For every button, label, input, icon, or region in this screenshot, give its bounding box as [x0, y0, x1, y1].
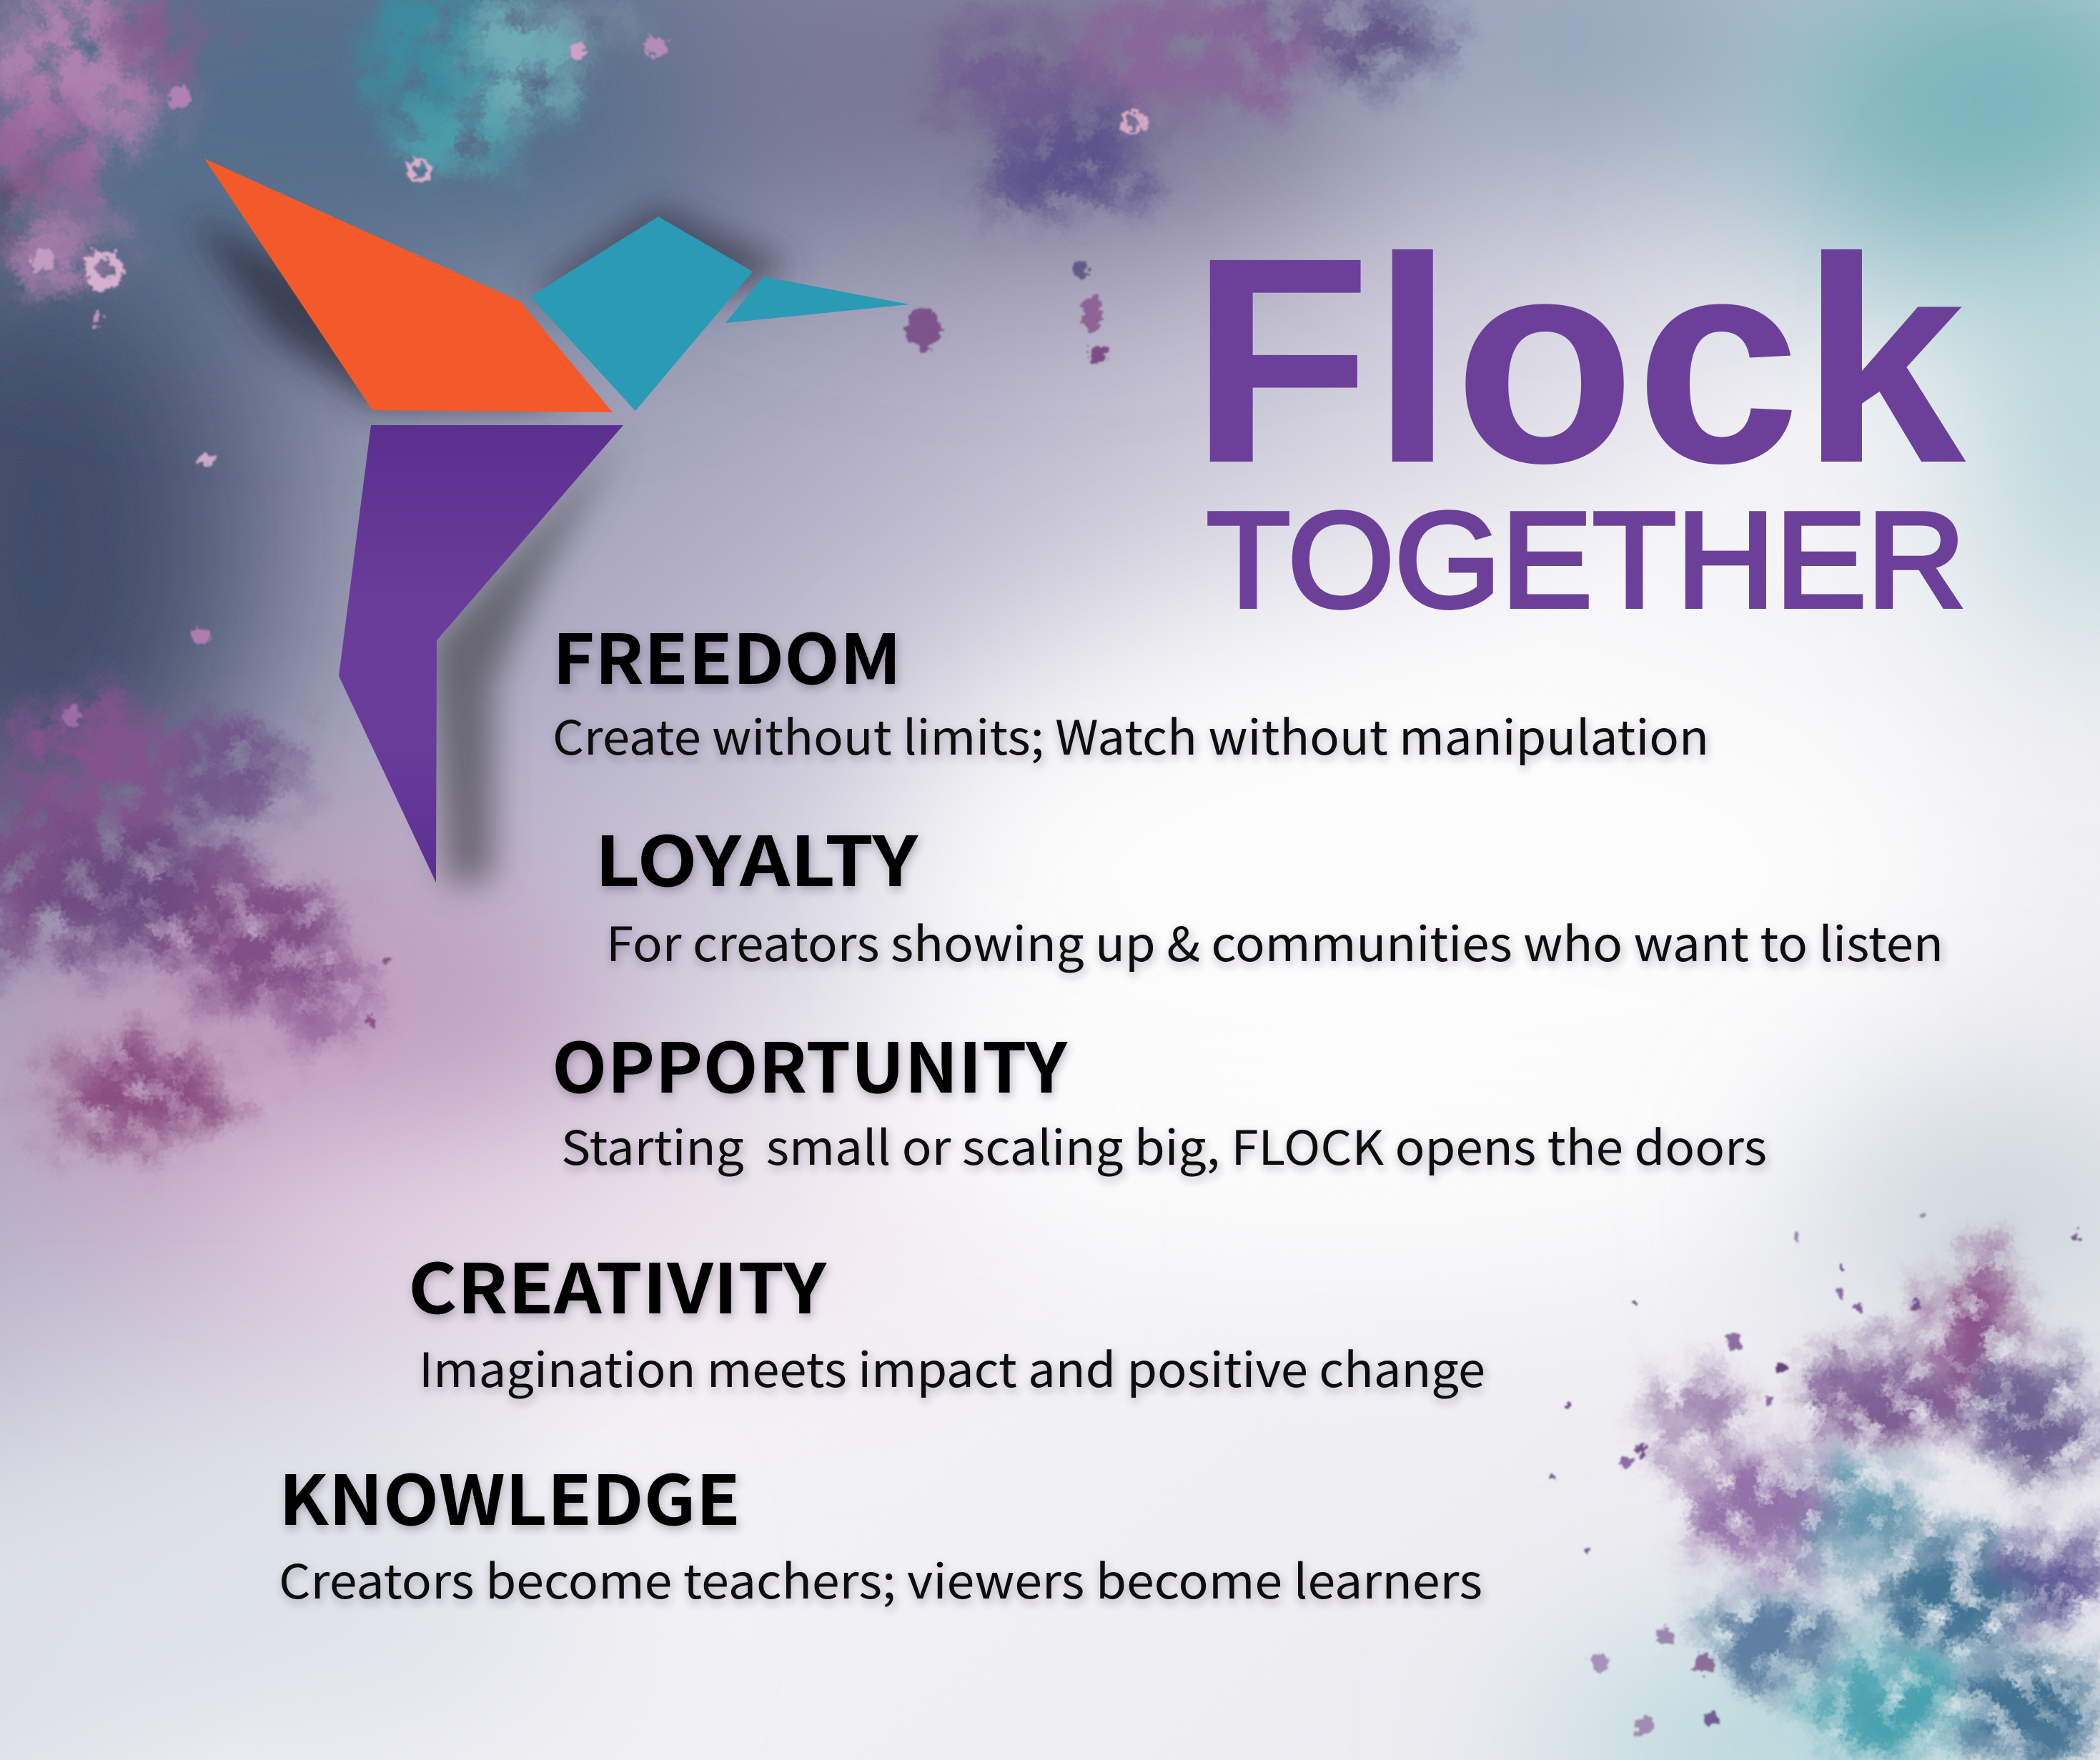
icon: teal beak — [725, 277, 909, 323]
icon: teal head — [530, 217, 753, 411]
heading: opportunity: OPPORTUNITY — [552, 1013, 1068, 1113]
heading: loyalty: LOYALTY — [595, 807, 919, 906]
paint blob: bottom right purple and teal — [1656, 1258, 2100, 1760]
heading: knowledge: KNOWLEDGE — [279, 1446, 741, 1545]
icon: purple body and tail — [339, 425, 623, 883]
description: opportunity: Starting small or scaling big, FLOCK opens the doors — [561, 1110, 1767, 1179]
value: opportunity — [552, 1013, 1767, 1179]
description: knowledge: Creators become teachers; viewers become learners — [279, 1544, 1482, 1613]
description: loyalty: For creators showing up & communities who want to listen — [606, 907, 1943, 975]
description: creativity: Imagination meets impact and positive change — [419, 1333, 1485, 1401]
paint blob: top left pink — [0, 0, 214, 289]
paint blob: top purple — [929, 0, 1440, 218]
logo shadow — [187, 204, 793, 886]
icon: orange wing — [204, 159, 613, 412]
value: creativity — [408, 1234, 1485, 1401]
hummingbird logo — [187, 159, 909, 886]
value: loyalty — [595, 807, 1943, 975]
title word: Flock: Flock — [1190, 197, 1968, 524]
title word: TOGETHER: TOGETHER — [1207, 484, 1966, 636]
value: knowledge — [279, 1446, 1482, 1613]
value: freedom — [553, 605, 1709, 769]
paint blob: top teal — [361, 0, 650, 161]
description: freedom: Create without limits; Watch without manipulation — [553, 700, 1709, 769]
paint blob: left lower purple — [0, 686, 365, 1143]
title — [1190, 197, 1968, 636]
heading: freedom: FREEDOM — [553, 605, 901, 704]
heading: creativity: CREATIVITY — [408, 1234, 827, 1333]
